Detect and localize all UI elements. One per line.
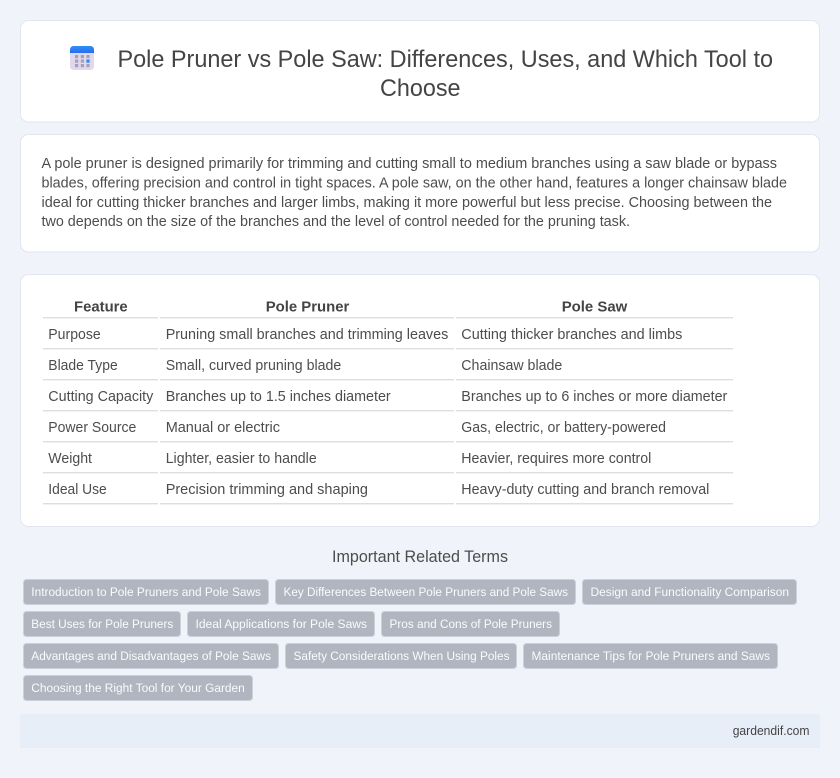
panel: comparison table: [20, 274, 820, 526]
tag: safety: [286, 644, 516, 668]
title: [118, 46, 773, 102]
tag: best uses: Best Uses for Pole Pruners: [31, 617, 173, 631]
table row: ideal use: [48, 482, 709, 498]
tag: design: Design and Functionality Comparison: [590, 585, 789, 599]
icon: calendar: [70, 46, 94, 70]
tag: introduction: Introduction to Pole Pruners and Pole Saws: [31, 585, 261, 599]
text block: summary: ideal for cutting thicker branches and larger limbs, making it more powerful but less precise. Choosing between the: [42, 195, 772, 211]
tag: choosing: [24, 676, 252, 700]
title: Pole Pruner vs Pole Saw: Differences, Uses, and Which Tool to: [118, 46, 773, 73]
table row: ideal use: Precision trimming and shaping: [166, 482, 368, 498]
table row: purpose: Purpose: [48, 327, 101, 343]
table row: ideal use: Ideal Use: [48, 482, 107, 498]
table row: purpose: Cutting thicker branches and limbs: [461, 327, 682, 343]
tag: key differences: Key Differences Between Pole Pruners and Pole Saws: [284, 585, 568, 599]
table row: purpose: Pruning small branches and trimming leaves: [166, 327, 448, 343]
tag: safety: Safety Considerations When Using Poles: [294, 649, 510, 663]
table header row: Pole Saw: [562, 298, 628, 316]
table row: purpose: [48, 327, 682, 343]
tag: ideal applications: Ideal Applications for Pole Saws: [196, 617, 367, 631]
table row: ideal use: Heavy-duty cutting and branch removal: [461, 482, 709, 498]
tag: choosing: Choosing the Right Tool for Your Garden: [31, 681, 245, 695]
title: Choose: [380, 75, 460, 102]
table row: power source: [48, 420, 666, 436]
text block: summary: A pole pruner is designed primarily for trimming and cutting small to medium branches using a saw blade or bypass: [42, 156, 777, 172]
table row: blade type: [48, 358, 562, 374]
tag: pros and cons: [382, 612, 560, 636]
tag: key differences: [276, 580, 576, 604]
tag: advantages: [24, 644, 278, 668]
table header row: Feature: [74, 298, 128, 316]
table row: blade type: Small, curved pruning blade: [166, 358, 341, 374]
tag: maintenance: Maintenance Tips for Pole Pruners and Saws: [532, 649, 770, 663]
table header row: Pole Pruner: [266, 298, 349, 316]
tag: advantages: Advantages and Disadvantages of Pole Saws: [31, 649, 271, 663]
text block: summary: two depends on the size of the branches and the level of control needed for the pruning task.: [42, 214, 630, 230]
table row: weight: [48, 451, 651, 467]
table row: cutting capacity: [48, 389, 727, 405]
table row: weight: Heavier, requires more control: [461, 451, 651, 467]
tag: ideal applications: [188, 612, 374, 636]
text block: summary: [42, 156, 787, 230]
table row: weight: Weight: [48, 451, 92, 467]
tag: best uses: [24, 612, 180, 636]
table row: blade type: Chainsaw blade: [461, 358, 562, 374]
tag: maintenance: [524, 644, 778, 668]
table row: cutting capacity: Cutting Capacity: [48, 389, 154, 405]
text block: summary: blades, offering precision and control in tight spaces. A pole saw, on the other hand, features a longer chainsaw blade: [42, 176, 787, 192]
table row: cutting capacity: Branches up to 1.5 inches diameter: [166, 389, 391, 405]
heading: important related terms: Important Related Terms: [332, 548, 508, 566]
table row: cutting capacity: Branches up to 6 inches or more diameter: [461, 389, 727, 405]
table row: power source: Power Source: [48, 420, 136, 436]
panel: related term tags: [24, 580, 796, 700]
tag: introduction: [24, 580, 268, 604]
table row: blade type: Blade Type: [48, 358, 118, 374]
tag: pros and cons: Pros and Cons of Pole Pruners: [390, 617, 552, 631]
table row: power source: Gas, electric, or battery-powered: [461, 420, 666, 436]
table header row: [74, 298, 628, 316]
tag: design: [582, 580, 796, 604]
footer source text: gardendif.com: [733, 723, 810, 738]
table row: power source: Manual or electric: [166, 420, 280, 436]
panel: title header: [20, 20, 820, 122]
panel: summary paragraph: [20, 134, 820, 252]
table row: weight: Lighter, easier to handle: [166, 451, 317, 467]
footer bar: [20, 714, 820, 748]
